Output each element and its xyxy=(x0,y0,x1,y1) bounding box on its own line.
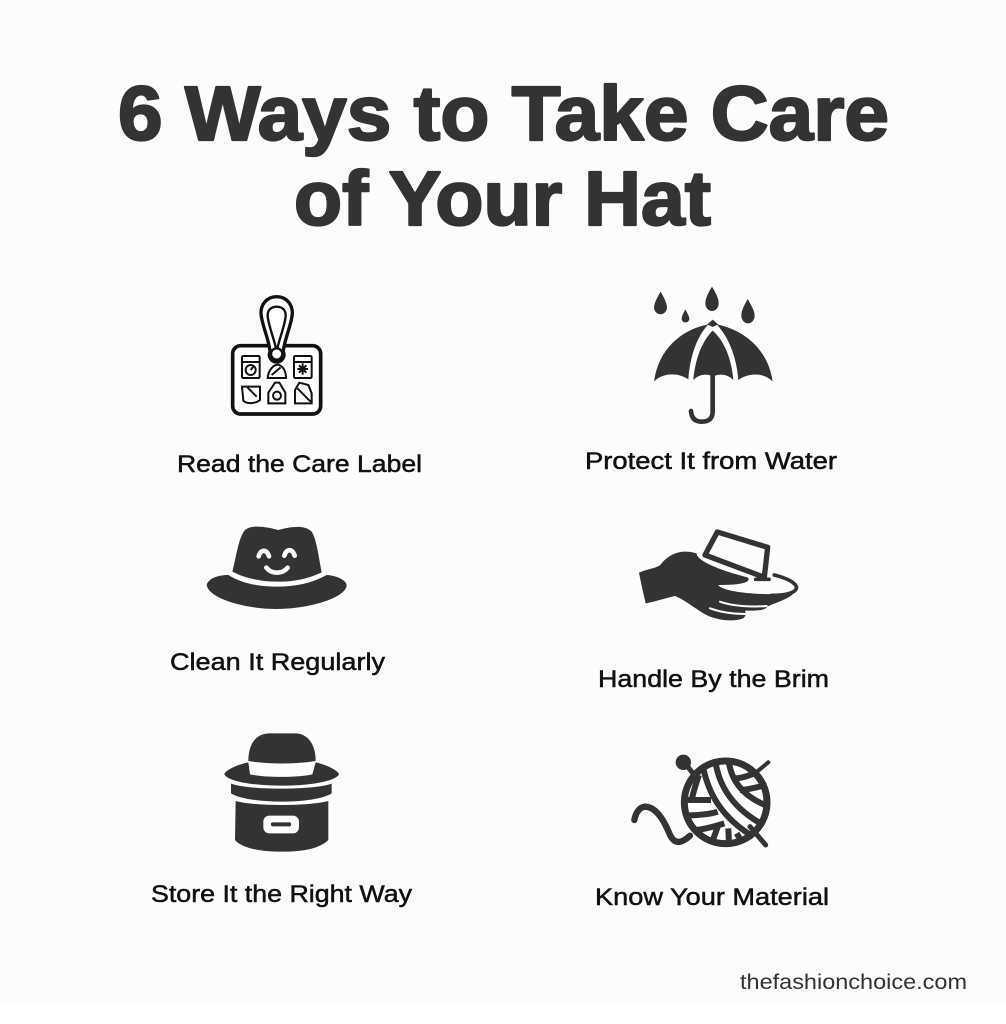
icon: hand holding hat by brim xyxy=(639,532,796,620)
icon: hat on a storage box xyxy=(224,733,339,852)
label: read the care label: Read the Care Label xyxy=(177,451,422,478)
label: store it the right way: Store It the Right Way xyxy=(151,881,412,908)
icon: care label tag xyxy=(233,297,321,414)
icon: ball of yarn xyxy=(634,755,768,845)
title: 6 Ways to Take Care xyxy=(118,71,889,157)
label: know your material: Know Your Material xyxy=(595,884,829,911)
label: clean it regularly: Clean It Regularly xyxy=(170,649,385,676)
label: handle by the brim: Handle By the Brim xyxy=(598,666,829,693)
title: of Your Hat xyxy=(294,156,711,242)
icon: smiling hat xyxy=(207,527,347,609)
icon: umbrella in rain xyxy=(654,287,773,422)
label: protect it from water: Protect It from Water xyxy=(585,448,837,475)
title xyxy=(118,71,889,242)
website credit: thefashionchoice.com xyxy=(740,971,967,994)
